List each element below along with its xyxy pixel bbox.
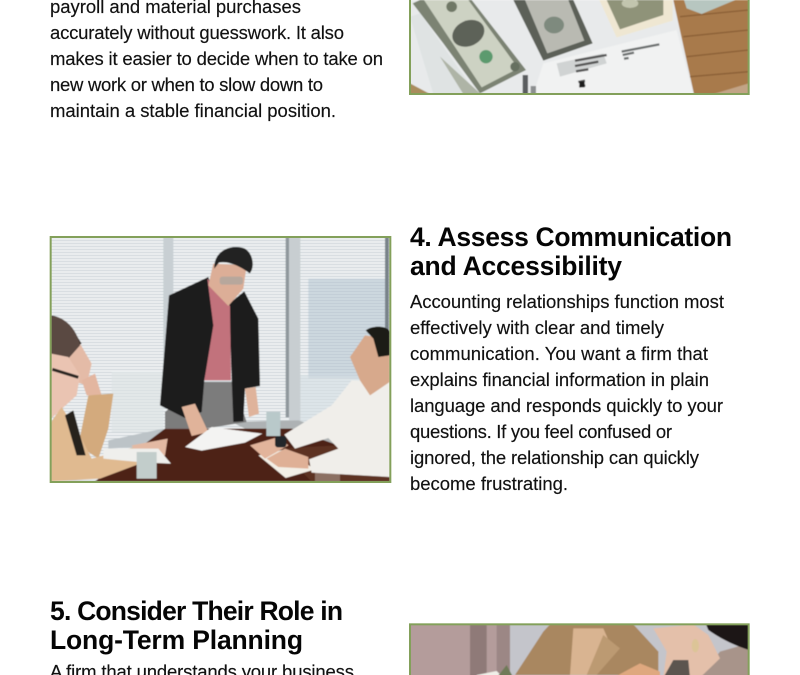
seated man, right (250, 327, 390, 477)
heading: section 4 (410, 222, 732, 281)
standing man (160, 247, 260, 436)
seated woman, rear (68, 336, 114, 458)
image: meeting around a conference table (51, 237, 390, 482)
heading: section 4: 4. Assess Communication (410, 222, 732, 252)
heading: section 5 (50, 596, 343, 655)
text block: section 4 paragraph (410, 291, 724, 494)
text block: section 3 closing paragraph (50, 0, 383, 121)
heading: section 5: 5. Consider Their Role in (50, 596, 343, 626)
text block: section 4 paragraph: questions. If you feel confused or (410, 421, 672, 442)
text block: section 4 paragraph: Accounting relationships function most (410, 291, 724, 312)
image: cash and financial charts (410, 0, 749, 94)
heading: section 4: and Accessibility (410, 251, 622, 281)
text block: section 3 closing paragraph: maintain a stable financial position. (50, 100, 336, 121)
text block: section 3 closing paragraph: new work or when to slow down to (50, 74, 323, 95)
window blinds background (51, 237, 390, 481)
seated woman, front (51, 315, 168, 481)
text block: section 4 paragraph: language and responds quickly to your (410, 395, 723, 416)
text block: section 4 paragraph: explains financial information in plain (410, 369, 709, 390)
text block: section 3 closing paragraph: accurately without guesswork. It also (50, 22, 344, 43)
conference table (95, 429, 390, 481)
text block: section 3 closing paragraph: makes it easier to decide when to take on (50, 48, 383, 69)
papers on the table (103, 427, 315, 478)
text block: section 4 paragraph: ignored, the relationship can quickly (410, 447, 700, 468)
text block: section 4 paragraph: become frustrating. (410, 473, 568, 494)
water glasses (137, 412, 340, 481)
image: colleagues reviewing documents (410, 624, 749, 675)
text block: section 4 paragraph: communication. You want a firm that (410, 343, 708, 364)
heading: section 5: Long-Term Planning (50, 625, 303, 655)
text block: section 4 paragraph: effectively with clear and timely (410, 317, 665, 338)
